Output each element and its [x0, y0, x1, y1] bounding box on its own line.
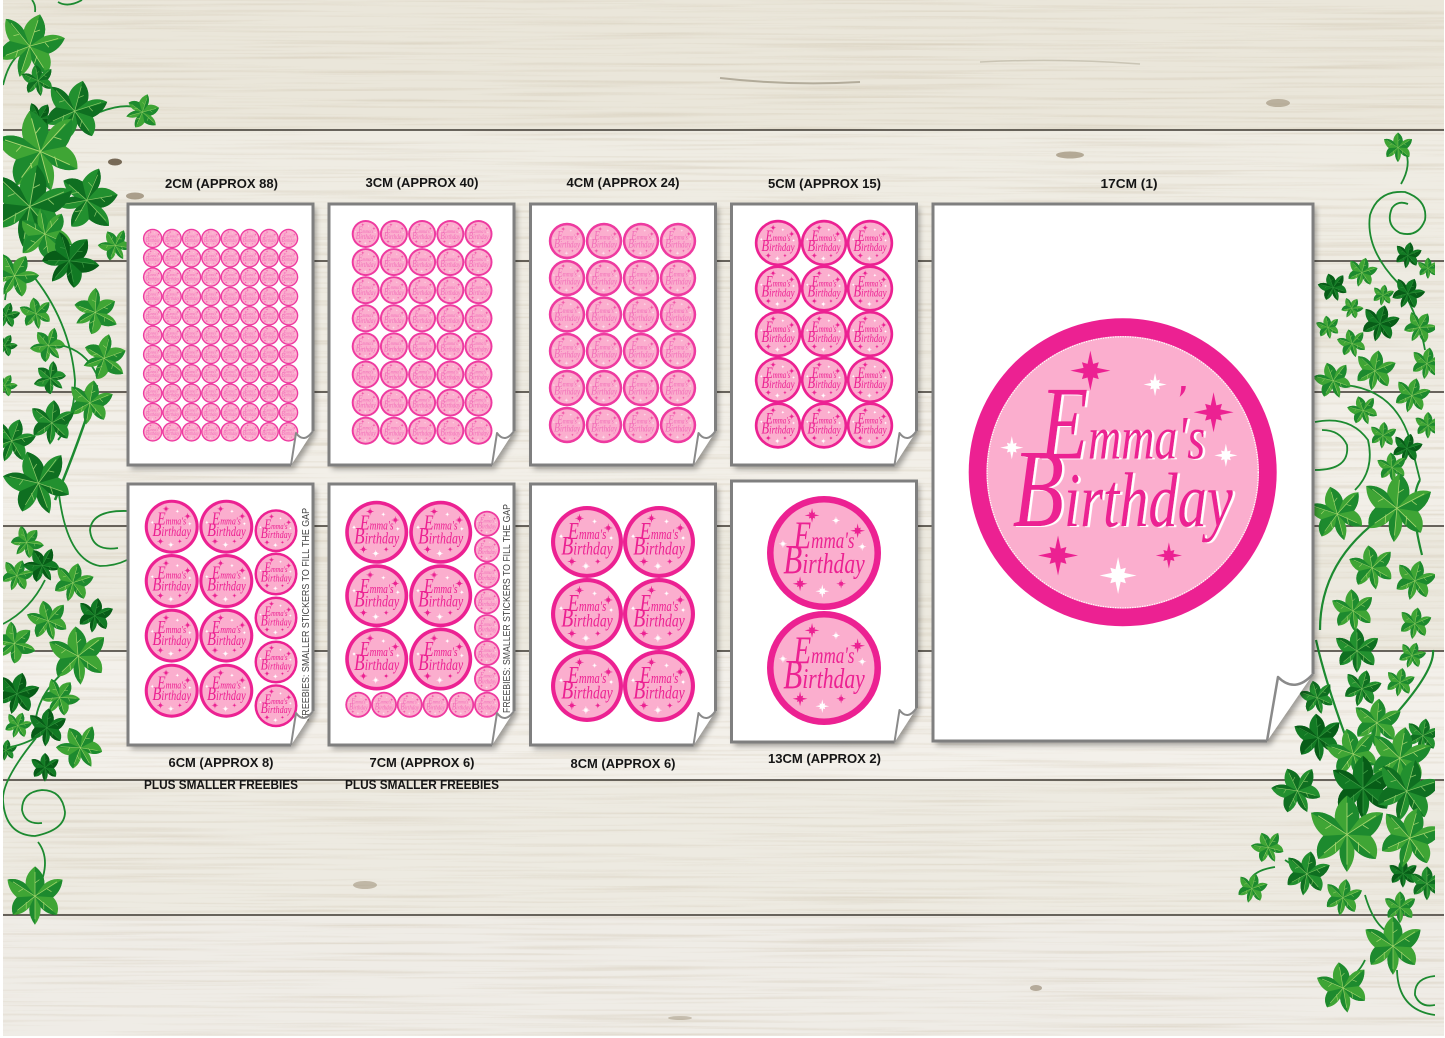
panel: 8cm sheet	[530, 484, 716, 745]
heading: 5cm: 5CM (APPROX 15)	[768, 177, 881, 191]
vertical note: 7cm freebies: FREEBIES: SMALLER STICKERS TO FILL THE GAP	[502, 504, 513, 713]
sticker grid: 7cm	[345, 501, 500, 718]
sticker grid: 13cm	[767, 496, 881, 725]
heading: 3cm: 3CM (APPROX 40)	[366, 176, 478, 190]
panel: 3cm sheet	[329, 204, 514, 465]
panel: 5cm sheet	[732, 204, 916, 465]
sticker: large Emma's Birthday	[969, 318, 1277, 626]
note: 7cm freebies: PLUS SMALLER FREEBIES	[345, 778, 499, 792]
page curl: 17cm	[1267, 674, 1313, 741]
note: 6cm freebies: PLUS SMALLER FREEBIES	[144, 778, 298, 792]
panel: 13cm sheet	[732, 481, 916, 742]
sticker grid: 8cm	[551, 506, 695, 722]
sticker grid: 4cm	[549, 223, 696, 443]
panel: 2cm sheet	[128, 204, 313, 465]
sticker: large Emma's Birthday: Emma's	[1039, 365, 1205, 481]
heading: 8cm: 8CM (APPROX 6)	[570, 757, 676, 771]
sticker grid: 6cm	[145, 500, 298, 727]
ivy: left side	[0, 0, 163, 925]
panel: 4cm sheet	[530, 204, 716, 465]
panel: 17cm sheet	[933, 204, 1313, 741]
heading: 13cm: 13CM (APPROX 2)	[768, 752, 881, 766]
heading: 17cm: 17CM (1)	[1100, 177, 1158, 191]
vertical note: 6cm freebies: FREEBIES: SMALLER STICKERS TO FILL THE GAP	[301, 508, 312, 721]
sticker grid: 2cm	[143, 229, 298, 442]
heading: 6cm: 6CM (APPROX 8)	[168, 756, 274, 770]
sticker grid: 5cm	[755, 220, 893, 449]
panel: 7cm sheet	[329, 484, 514, 745]
sticker: large Emma's Birthday: Birthday	[1013, 427, 1233, 550]
heading: 2cm: 2CM (APPROX 88)	[165, 177, 278, 191]
sticker grid: 3cm	[352, 220, 492, 445]
ivy: right side	[1235, 132, 1445, 1017]
heading: 7cm: 7CM (APPROX 6)	[370, 756, 474, 770]
vines: left side	[3, 0, 135, 890]
heading: 4cm: 4CM (APPROX 24)	[566, 176, 680, 190]
vines: right side	[1250, 150, 1435, 1015]
panel: 6cm sheet	[128, 484, 313, 745]
